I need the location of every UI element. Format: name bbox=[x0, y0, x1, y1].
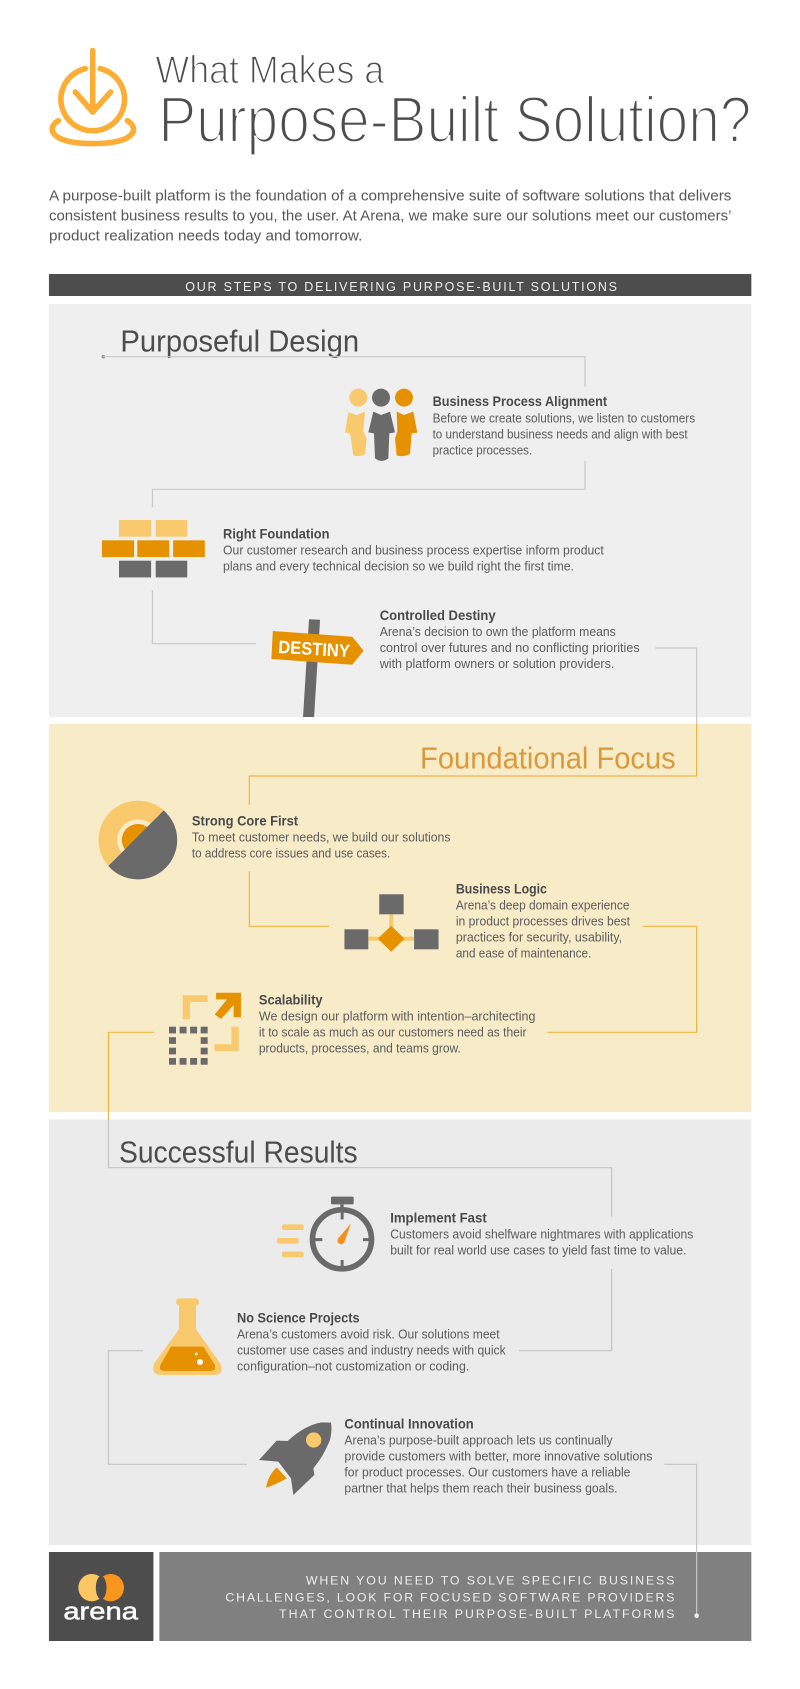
text: strong core first: Strong Core First bbox=[192, 814, 299, 829]
icon: flask bbox=[153, 1298, 222, 1375]
icon: download into base bbox=[52, 50, 134, 144]
text: right foundation: Right Foundation bbox=[223, 527, 330, 542]
logo: arena: arena bbox=[63, 1598, 139, 1625]
text: scalability bbox=[259, 992, 535, 1055]
text: business logic: in product processes drives best bbox=[456, 914, 630, 929]
intro paragraph: consistent business results to you, the user. At Arena, we make sure our solutions meet our customers’ bbox=[49, 207, 731, 225]
text: business process alignment: Before we create solutions, we listen to customers bbox=[433, 410, 696, 425]
text: right foundation: plans and every technical decision so we build right the first time. bbox=[223, 559, 574, 574]
icon: business logic diagram bbox=[344, 894, 439, 952]
closing message banner bbox=[159, 1552, 751, 1641]
heading: successful results: Successful Results bbox=[119, 1136, 358, 1170]
closing message banner: CHALLENGES, LOOK FOR FOCUSED SOFTWARE PROVIDERS bbox=[225, 1590, 674, 1604]
text: business logic: and ease of maintenance. bbox=[456, 946, 591, 961]
text: business process alignment: to understand business needs and align with best bbox=[433, 426, 688, 441]
text: controlled destiny: Arena’s decision to own the platform means bbox=[380, 624, 616, 639]
text: implement fast bbox=[390, 1211, 694, 1258]
text: no science projects: No Science Projects bbox=[237, 1311, 360, 1326]
text: business logic: Business Logic bbox=[456, 882, 547, 897]
text: controlled destiny: control over futures and no conflicting priorities bbox=[380, 640, 640, 655]
icon: brick wall bbox=[102, 520, 205, 577]
heading: foundational focus: Foundational Focus bbox=[420, 741, 676, 775]
heading: purposeful design: Purposeful Design bbox=[120, 325, 359, 359]
text: business process alignment bbox=[433, 394, 696, 457]
intro paragraph: A purpose-built platform is the foundation of a comprehensive suite of software solutions that delivers bbox=[49, 187, 731, 204]
text: continual innovation bbox=[344, 1417, 653, 1496]
closing message banner: WHEN YOU NEED TO SOLVE SPECIFIC BUSINESS bbox=[306, 1573, 674, 1587]
icon: destiny signpost: DESTINY bbox=[278, 637, 350, 661]
text: business logic: practices for security, usability, bbox=[456, 930, 622, 945]
text: business process alignment: Business Process Alignment bbox=[433, 394, 608, 409]
panel: purposeful design bbox=[49, 304, 751, 717]
text: right foundation: Our customer research and business process expertise inform product bbox=[223, 543, 604, 558]
text: controlled destiny: Controlled Destiny bbox=[380, 608, 496, 623]
intro paragraph: product realization needs today and tomorrow. bbox=[49, 227, 362, 244]
icon: core circle bbox=[99, 801, 177, 879]
text: strong core first: To meet customer needs, we build our solutions bbox=[192, 830, 451, 845]
text: no science projects bbox=[237, 1311, 506, 1374]
text: right foundation bbox=[223, 527, 604, 574]
text: business logic bbox=[456, 882, 630, 961]
text: business process alignment: practice processes. bbox=[433, 442, 532, 457]
logo: arena bbox=[49, 1552, 153, 1641]
text: continual innovation: partner that helps them reach their business goals. bbox=[344, 1481, 618, 1496]
panel: successful results bbox=[49, 1120, 751, 1545]
text: business logic: Arena’s deep domain experience bbox=[456, 898, 629, 913]
text: continual innovation: Continual Innovation bbox=[344, 1417, 474, 1432]
icon: stopwatch bbox=[277, 1197, 371, 1269]
icon: three people bbox=[345, 389, 417, 461]
text: continual innovation: Arena’s purpose-built approach lets us continually bbox=[344, 1433, 613, 1448]
text: scalability: it to scale as much as our customers need as their bbox=[259, 1024, 527, 1039]
connector: purposeful design path bbox=[102, 355, 697, 724]
text: implement fast: built for real world use cases to yield fast time to value. bbox=[390, 1243, 686, 1258]
closing message banner: THAT CONTROL THEIR PURPOSE-BUILT PLATFORMS bbox=[279, 1607, 674, 1621]
text: strong core first: to address core issues and use cases. bbox=[192, 846, 390, 861]
section banner: our steps: OUR STEPS TO DELIVERING PURPOSE-BUILT SOLUTIONS bbox=[185, 280, 617, 294]
intro paragraph bbox=[49, 187, 731, 244]
text: no science projects: Arena’s customers avoid risk. Our solutions meet bbox=[237, 1327, 500, 1342]
title: What Makes a bbox=[155, 49, 385, 92]
text: implement fast: Customers avoid shelfware nightmares with applications bbox=[390, 1227, 694, 1242]
icon: rocket bbox=[259, 1422, 331, 1495]
icon: destiny signpost bbox=[271, 619, 364, 717]
text: scalability: Scalability bbox=[259, 992, 323, 1007]
section banner: our steps bbox=[49, 274, 751, 296]
text: continual innovation: for product processes. Our customers have a reliable bbox=[344, 1465, 630, 1480]
text: implement fast: Implement Fast bbox=[390, 1211, 487, 1226]
connector: successful results path bbox=[108, 1120, 699, 1618]
panel: foundational focus bbox=[49, 724, 751, 1112]
connector: foundational focus path bbox=[108, 724, 697, 1120]
text: controlled destiny bbox=[379, 608, 640, 671]
text: controlled destiny: with platform owners or solution providers. bbox=[379, 656, 614, 671]
text: no science projects: customer use cases and industry needs with quick bbox=[237, 1343, 506, 1358]
title bbox=[155, 49, 751, 156]
text: scalability: We design our platform with intention–architecting bbox=[259, 1008, 535, 1023]
icon: scalability expanding square bbox=[169, 993, 241, 1065]
text: scalability: products, processes, and teams grow. bbox=[259, 1040, 461, 1055]
text: strong core first bbox=[192, 814, 451, 861]
text: no science projects: configuration–not customization or coding. bbox=[237, 1359, 469, 1374]
text: continual innovation: provide customers with better, more innovative solutions bbox=[344, 1449, 653, 1464]
